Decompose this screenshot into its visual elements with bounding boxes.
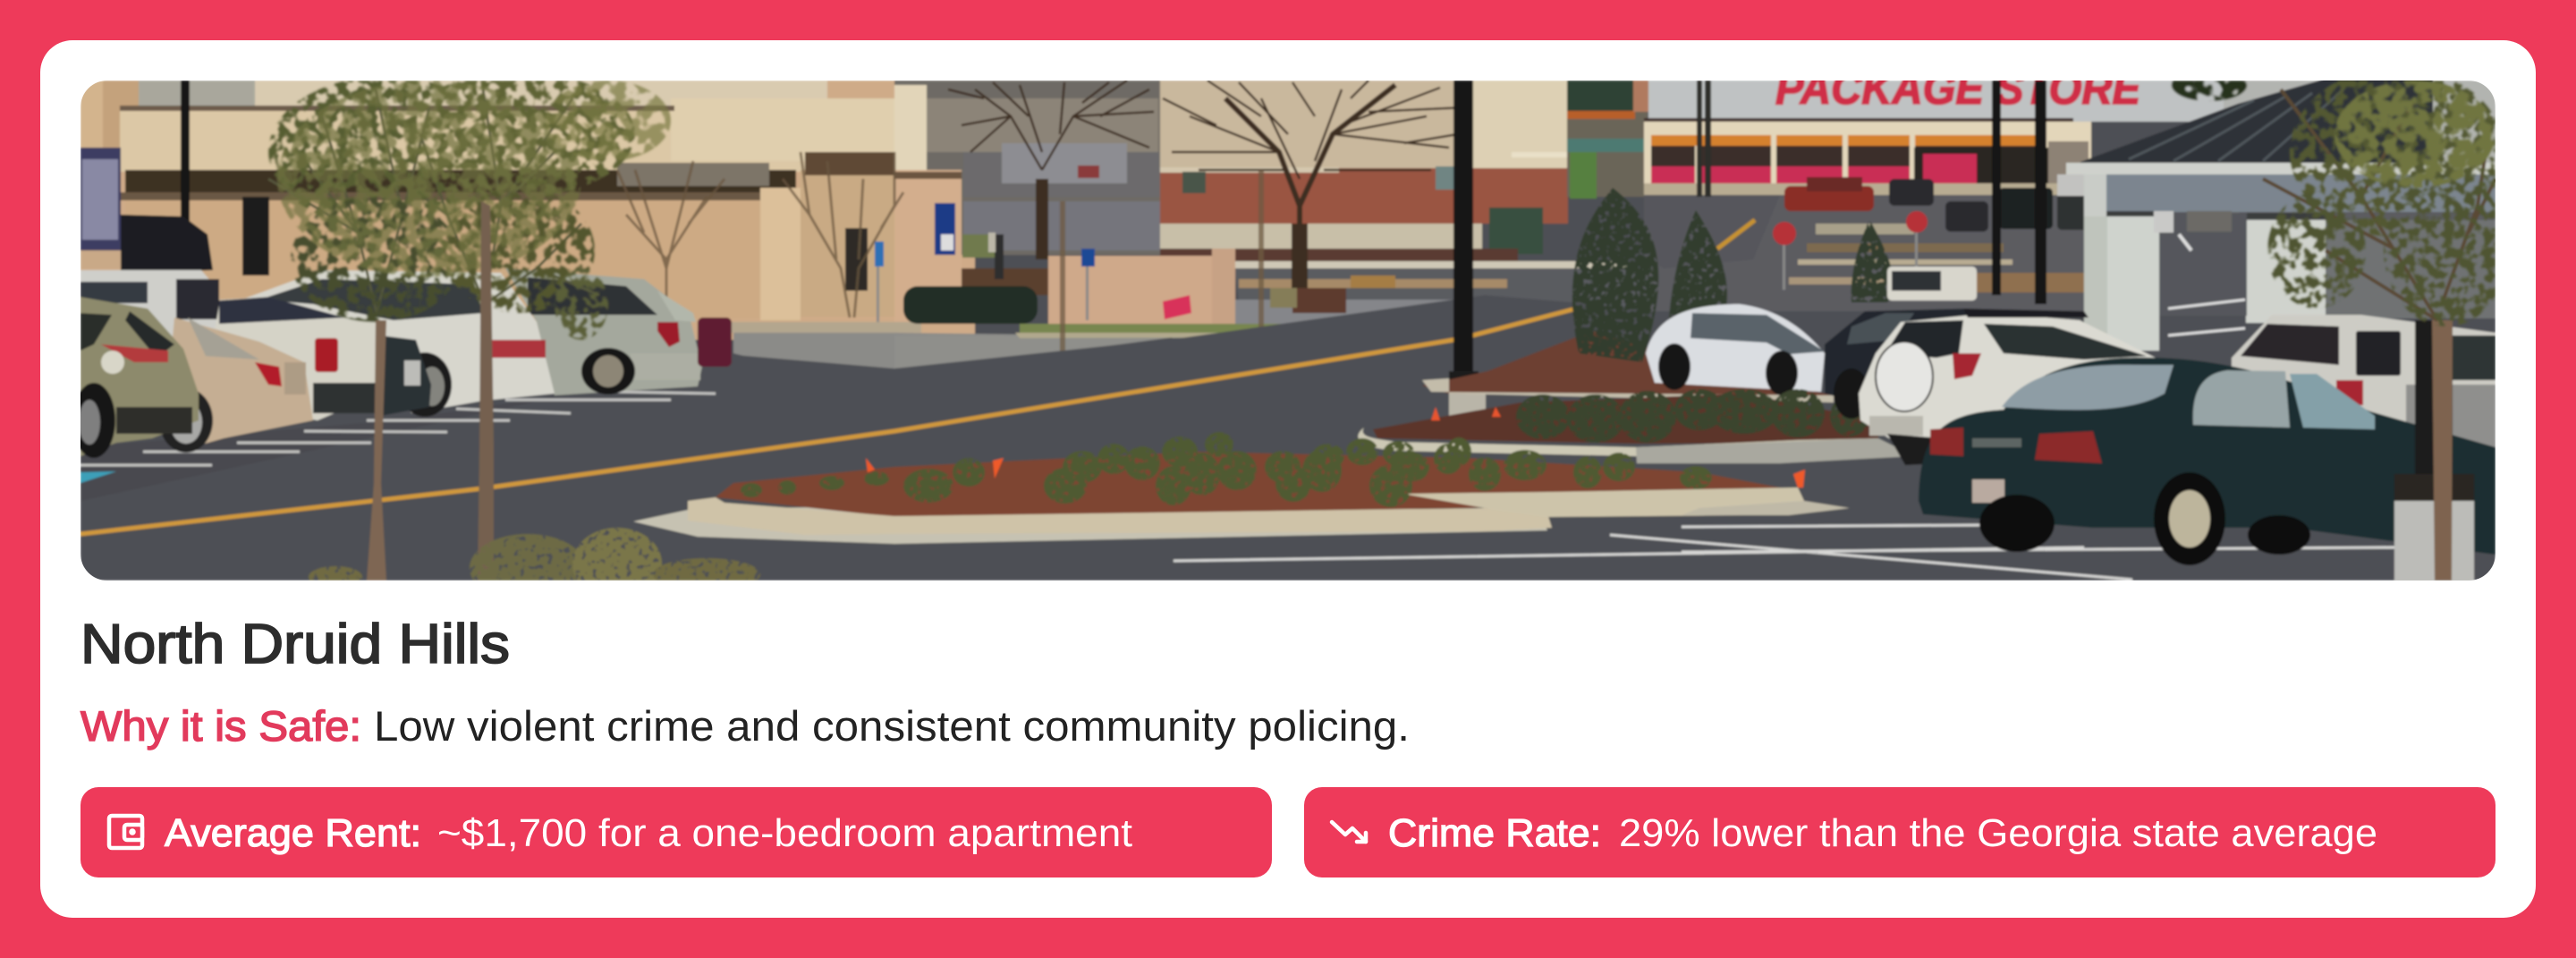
white minivan <box>242 270 555 413</box>
right tree and planter <box>2415 320 2453 504</box>
panel: average rent: ~$1,700 for a one-bedroom apartment <box>437 811 1132 855</box>
tree trunks left <box>367 320 386 581</box>
curbs back <box>707 322 921 333</box>
centre background <box>894 81 1163 255</box>
bg cars at store <box>1784 186 1874 211</box>
roof pavilion <box>2224 81 2496 170</box>
left building <box>80 81 975 340</box>
heading: neighbourhood name: North Druid Hills <box>80 614 510 675</box>
text block: why it is safe: Low violent crime and consistent community policing. <box>374 702 1410 750</box>
shop at right of brick <box>1565 112 1648 198</box>
silver minivan <box>505 268 702 395</box>
text block: why it is safe: Why it is Safe: <box>80 702 361 750</box>
left poster <box>80 148 121 250</box>
white pickup back <box>1887 267 1977 301</box>
silver suv right <box>2232 315 2496 474</box>
bare trees <box>616 81 1456 352</box>
beige sedan <box>165 318 313 447</box>
dark suv <box>1825 309 1968 420</box>
brick building <box>1159 81 1456 170</box>
photo: parking lot scene <box>80 81 2496 581</box>
main road edges <box>744 295 1585 459</box>
panel: crime rate <box>1304 787 2496 877</box>
white pickup <box>215 297 380 420</box>
photo: parking lot scene: PACKAGE STORE <box>1775 64 2142 114</box>
asphalt back <box>1646 195 2496 311</box>
hedge, tan wall, sign <box>903 286 1038 324</box>
white suv <box>1859 313 2156 465</box>
panel: crime rate: 29% lower than the Georgia state average <box>1619 811 2377 855</box>
parking stall lines <box>80 391 716 465</box>
centre island <box>633 505 1547 544</box>
parking lines right <box>1174 525 2394 580</box>
panel: average rent <box>80 787 1272 877</box>
white van <box>80 270 220 340</box>
icon: wallet <box>109 816 142 848</box>
yellow line <box>80 309 1576 534</box>
second island <box>1373 394 1878 444</box>
cypress trees <box>1572 188 1894 362</box>
stop signs <box>1773 222 1796 245</box>
maroon car <box>698 318 732 367</box>
gold suv <box>80 297 199 456</box>
poles back <box>1992 81 2001 295</box>
white sedan <box>1646 304 1825 392</box>
third island <box>1422 331 1843 398</box>
tree branches left <box>268 89 599 313</box>
panel: average rent: Average Rent: <box>165 811 421 855</box>
dark sedan behind <box>380 335 431 416</box>
pole front <box>1453 81 1473 376</box>
light pavement <box>732 332 1018 370</box>
tree foliage left <box>268 72 635 340</box>
bottom bushes <box>308 527 760 581</box>
dark suv rear <box>121 215 213 273</box>
panel: crime rate: Crime Rate: <box>1388 811 1601 855</box>
package store <box>1648 81 2239 122</box>
dark green sedan <box>1919 358 2496 555</box>
icon: trending down arrow <box>1332 822 1366 842</box>
